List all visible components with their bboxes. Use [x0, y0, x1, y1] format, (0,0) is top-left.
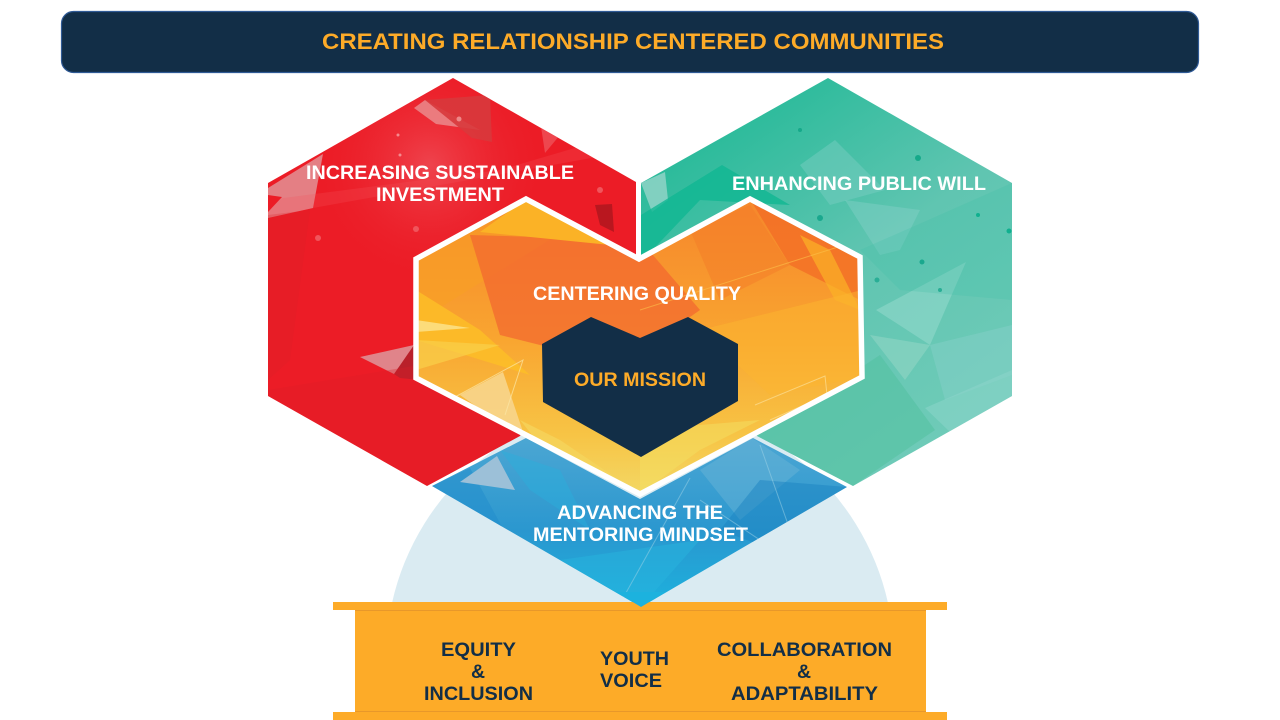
label: youth voice: YOUTH — [600, 648, 669, 670]
panel: enhancing public will hexagon — [641, 78, 1012, 486]
beam top flange — [333, 602, 947, 610]
label: equity and inclusion: EQUITY — [441, 639, 516, 661]
panel: increasing sustainable investment hexagon — [268, 78, 636, 486]
title text: CREATING RELATIONSHIP CENTERED COMMUNITIES — [322, 29, 944, 54]
label: our mission: OUR MISSION — [574, 369, 706, 391]
pale blue semicircle backdrop — [392, 404, 888, 603]
panel: our mission core heart — [542, 317, 738, 457]
label: youth voice: VOICE — [600, 670, 662, 692]
label: increasing sustainable investment: INCREASING SUSTAINABLE — [306, 162, 574, 184]
label: advancing the mentoring mindset — [533, 502, 748, 546]
beam bottom flange — [333, 712, 947, 720]
chevron tip overlapping beam — [616, 592, 666, 607]
label: collaboration and adaptability — [717, 639, 892, 705]
label: advancing the mentoring mindset: ADVANCING THE — [557, 502, 723, 524]
label: collaboration and adaptability: ADAPTABILITY — [731, 683, 878, 705]
label: centering quality: CENTERING QUALITY — [533, 283, 741, 305]
title banner — [62, 12, 1198, 72]
label: equity and inclusion: & — [471, 661, 485, 683]
label: collaboration and adaptability: & — [797, 661, 811, 683]
label: collaboration and adaptability: COLLABORATION — [717, 639, 892, 661]
label: advancing the mentoring mindset: MENTORING MINDSET — [533, 524, 748, 546]
label: equity and inclusion — [424, 639, 533, 705]
panel: advancing the mentoring mindset chevron — [432, 438, 847, 607]
panel: centering quality heart — [416, 199, 862, 494]
label: increasing sustainable investment — [306, 162, 574, 206]
panel: foundation beam — [333, 602, 947, 720]
label: youth voice — [600, 648, 669, 692]
beam body — [355, 610, 926, 712]
label: increasing sustainable investment: INVESTMENT — [376, 184, 504, 206]
label: equity and inclusion: INCLUSION — [424, 683, 533, 705]
label: enhancing public will: ENHANCING PUBLIC WILL — [732, 173, 986, 195]
